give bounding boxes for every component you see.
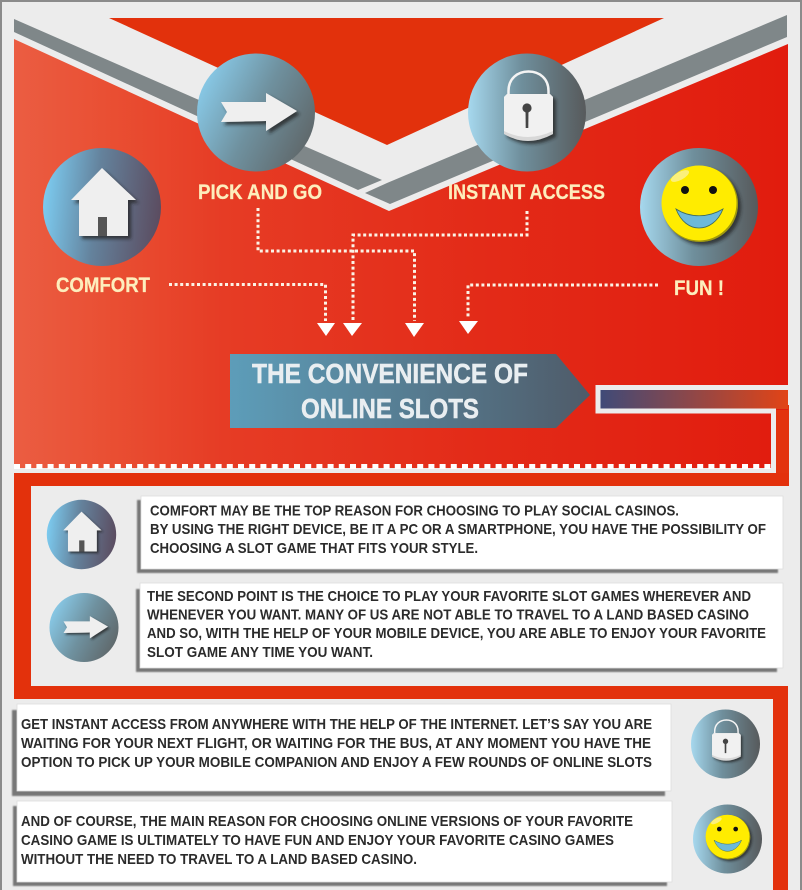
title banner [230,354,590,428]
label: comfort: COMFORT [56,274,150,297]
title banner: THE CONVENIENCE OF [252,358,528,389]
text box: second point [136,583,783,672]
text box: fun: WITHOUT THE NEED TO TRAVEL TO A LAND BASED CASINO. [21,852,417,868]
text box: instant access [12,704,671,796]
icon: smiley [640,148,758,266]
text box: comfort: COMFORT MAY BE THE TOP REASON FOR CHOOSING TO PLAY SOCIAL CASINOS. [150,504,679,520]
dotted arrow: pick and go [258,208,424,337]
icon: house [43,148,161,266]
label: pick and go: PICK AND GO [198,181,322,204]
text box: fun [13,801,672,886]
text box: comfort: CHOOSING A SLOT GAME THAT FITS YOUR STYLE. [150,541,478,557]
label: fun: FUN ! [674,277,724,300]
dotted arrow: instant access [343,211,527,336]
text box: second point: SLOT GAME ANY TIME YOU WANT. [147,645,373,661]
text box: instant access: WAITING FOR YOUR NEXT FLIGHT, OR WAITING FOR THE BUS, AT ANY MOMENT YOU HAVE THE [21,736,651,752]
small icon: padlock [691,709,760,779]
grey band left [14,19,382,190]
text box: fun: CASINO GAME IS ULTIMATELY TO HAVE FUN AND ENJOY YOUR FAVORITE CASINO GAMES [21,833,614,849]
text box: fun: AND OF COURSE, THE MAIN REASON FOR CHOOSING ONLINE VERSIONS OF YOUR FAVORITE [21,814,633,830]
text box: comfort [137,496,783,573]
red frame: upper details panel [14,473,789,890]
small icon: smiley [693,804,762,874]
dotted arrow: comfort [169,284,335,336]
small icon: arrow [49,593,119,662]
icon: padlock [468,54,586,172]
text box: instant access: GET INSTANT ACCESS FROM ANYWHERE WITH THE HELP OF THE INTERNET. LET’S SAY YOU ARE [21,717,652,733]
dotted arrow: fun [459,285,658,334]
text box: second point: WHENEVER YOU WANT. MANY OF US ARE NOT ABLE TO TRAVEL TO A LAND BASED CASINO [147,608,749,624]
top red triangle [109,18,664,145]
lower red strip [14,405,789,486]
text box: instant access: OPTION TO PICK UP YOUR MOBILE COMPANION AND ENJOY A FEW ROUNDS OF ONLINE SLOTS [21,755,652,771]
small icon: house [47,500,116,569]
main red header panel [14,39,788,468]
icon: arrow [197,54,315,172]
connector bar [14,388,788,470]
label: instant access: INSTANT ACCESS [448,181,605,204]
grey band right [365,15,787,204]
perforated edge [14,464,771,469]
text box: second point: THE SECOND POINT IS THE CHOICE TO PLAY YOUR FAVORITE SLOT GAMES WHEREVER AND [147,589,751,605]
title banner: ONLINE SLOTS [301,393,479,424]
